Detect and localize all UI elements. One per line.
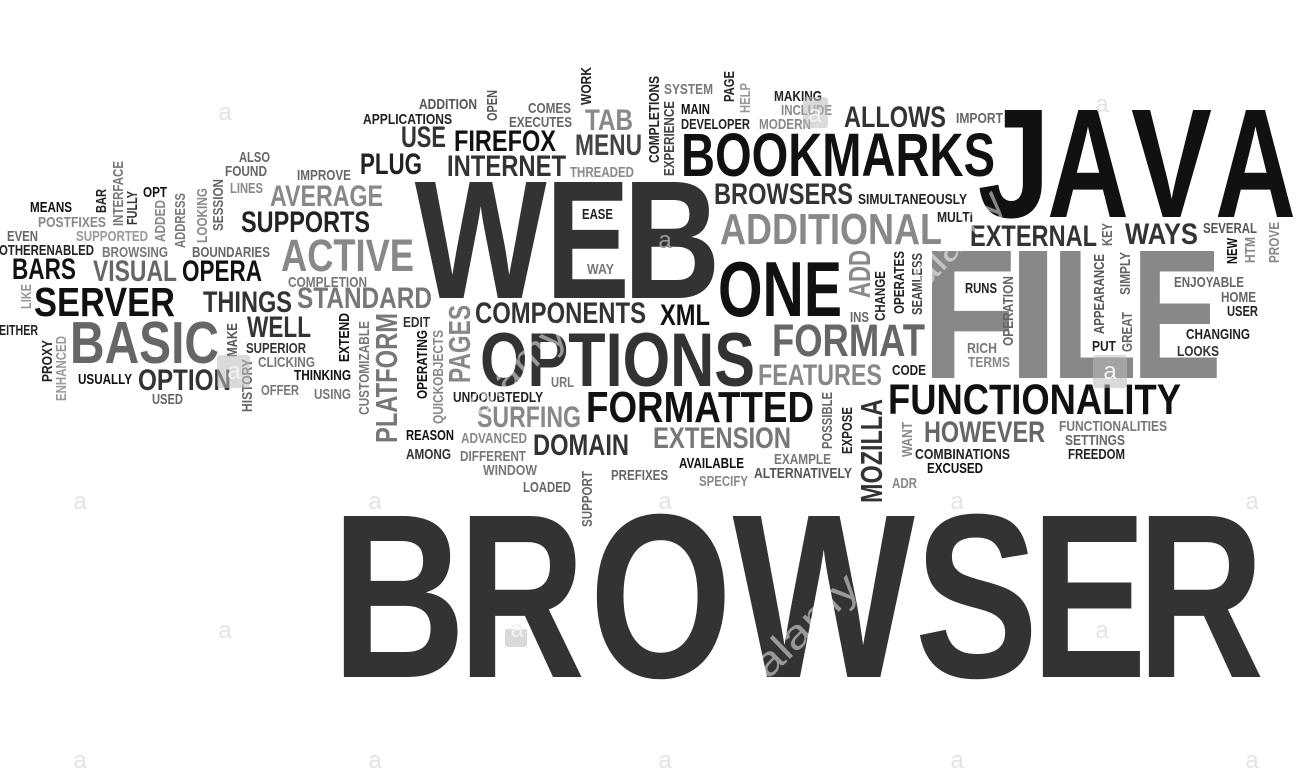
word: BROWSER: E [1031, 465, 1147, 727]
small words: left cluster: MEANS [30, 199, 72, 216]
word: BROWSER: W [732, 465, 915, 727]
small words: left cluster: EVEN [7, 228, 38, 245]
small words: top cluster: SYSTEM [664, 81, 713, 98]
small words: right cluster: CHANGING [1186, 326, 1250, 343]
medium words: EXTERNAL [970, 220, 1097, 253]
small words: centre cluster: EXTEND [336, 313, 353, 362]
small words: left cluster: USUALLY [78, 371, 132, 388]
small words: left cluster: PROXY [39, 340, 56, 382]
small words: right cluster: HOME [1221, 289, 1256, 306]
small words: centre cluster: WINDOW [483, 462, 538, 479]
small words: centre cluster: REASON [406, 427, 454, 444]
small words: right cluster: ENJOYABLE [1174, 274, 1244, 291]
watermark: diagonal alamy marks: alamy [900, 181, 1013, 296]
small words: right cluster: RICH [967, 340, 997, 357]
word: JAVA: J [978, 76, 1051, 250]
small words: centre cluster: OPERATES [891, 251, 908, 314]
small words: top cluster: SIMULTANEOUSLY [858, 191, 967, 208]
medium words: COMPONENTS [475, 297, 646, 330]
small words: right cluster: HTM [1242, 237, 1259, 263]
small words: left cluster: OTHERENABLED [0, 242, 94, 259]
small words: right cluster: APPEARANCE [1091, 254, 1108, 334]
medium words: WELL [247, 311, 311, 344]
medium words: FEATURES [758, 359, 882, 392]
word: FILE: F [922, 212, 1016, 418]
watermark: letter marks: a [1095, 617, 1109, 644]
small words: top cluster: THREADED [570, 164, 634, 181]
word: WEB: E [546, 145, 630, 334]
small words: left cluster: OFFER [261, 382, 299, 399]
small words: left cluster: USED [152, 391, 183, 408]
watermark: letter marks: a [950, 488, 964, 515]
small words: top cluster: MULTI [937, 209, 973, 226]
small words: centre cluster: CHANGE [872, 271, 889, 321]
word: FILE: I [1006, 212, 1060, 418]
small words: left cluster: OPT [143, 184, 167, 201]
word: BASIC: BASIC [70, 310, 219, 376]
medium words: STANDARD [297, 282, 432, 315]
small words: centre cluster: EXPOSE [839, 407, 856, 454]
watermark: letter marks: a [218, 617, 232, 644]
small words: right cluster: LOOKS [1177, 343, 1219, 360]
small words: centre cluster: CUSTOMIZABLE [356, 321, 373, 415]
small words: left cluster: BROWSING [102, 244, 168, 261]
medium words: OPTION [138, 364, 231, 397]
word: FORMATTED: FORMATTED [586, 383, 814, 432]
word: WEB: W [415, 145, 547, 334]
small words: top cluster: PAGE [721, 71, 738, 102]
small words: centre cluster: WANT [899, 422, 916, 457]
word: ADDITIONAL: ADDITIONAL [720, 205, 942, 254]
small words: top cluster: APPLICATIONS [363, 111, 452, 128]
small words: top cluster: MODERN [759, 116, 811, 133]
small words: left cluster: HISTORY [239, 359, 256, 412]
word: BROWSER: S [915, 465, 1038, 727]
small words: left cluster: EITHER [0, 322, 38, 339]
word: FORMAT: FORMAT [772, 315, 925, 366]
watermark: letter marks: a [658, 488, 672, 515]
medium words: TAB [585, 104, 633, 137]
small words: top cluster: EXECUTES [509, 114, 572, 131]
medium words: ALLOWS [844, 101, 946, 134]
medium words: PLUG [360, 148, 422, 181]
small words: centre cluster: EXAMPLE [774, 451, 831, 468]
watermark: diagonal alamy marks: alamy [744, 565, 868, 686]
watermark: letter marks: a [218, 99, 232, 126]
medium words: INTERNET [447, 150, 566, 183]
word: BOOKMARKS: BOOKMARKS [681, 121, 995, 189]
small words: centre cluster: QUICKOBJECTS [430, 330, 447, 424]
small words: right cluster [915, 220, 1283, 477]
small words: left cluster: SESSION [210, 179, 227, 231]
small words: right cluster: SIMPLY [1117, 252, 1134, 295]
medium words: BARS [12, 253, 76, 286]
word: ACTIVE: ACTIVE [281, 230, 414, 281]
word: SERVER: SERVER [34, 279, 175, 325]
small words: right cluster: OPERATION [1000, 276, 1017, 346]
watermark: letter marks: a [73, 488, 87, 515]
medium words: AVERAGE [270, 180, 383, 213]
small words: centre cluster: POSSIBLE [819, 392, 836, 449]
small words: centre cluster: SEAMLESS [909, 253, 926, 315]
word: ADD: ADD [842, 250, 877, 298]
small words: centre cluster: AVAILABLE [679, 455, 744, 472]
watermark: diagonal alamy marks: alamy [457, 312, 575, 425]
medium words: XML [660, 299, 710, 332]
medium words [12, 101, 1198, 462]
small words: centre cluster: OPERATING [414, 330, 431, 399]
small words: left cluster: SUPPORTED [76, 228, 148, 245]
medium words: SURFING [477, 401, 581, 434]
small words: right cluster: FUNCTIONALITIES [1059, 418, 1167, 435]
watermark: letter marks: a [808, 101, 822, 128]
small words: top cluster [297, 67, 1003, 278]
watermark: letter marks: a [227, 358, 241, 385]
small words: centre cluster: ADVANCED [461, 430, 527, 447]
small words: right cluster: FREEDOM [1068, 446, 1125, 463]
word: BROWSER: R [458, 465, 585, 727]
small words: centre cluster: EDIT [403, 314, 430, 331]
small words: left cluster: ADDED [152, 200, 169, 242]
small words: left cluster: FOUND [225, 163, 267, 180]
word: PLATFORM: PLATFORM [369, 313, 404, 443]
small words: right cluster: SETTINGS [1065, 432, 1125, 449]
word: MOZILLA: MOZILLA [854, 399, 889, 503]
small words: top cluster: OPEN [484, 90, 501, 121]
small words: top cluster: COMPLETIONS [646, 76, 663, 163]
small words: right cluster: NEW [1224, 237, 1241, 264]
small words: top cluster: EXPERIENCE [661, 101, 678, 176]
small words: right cluster: USER [1227, 303, 1258, 320]
small words: left cluster: FULLY [124, 191, 141, 225]
word: OPTIONS: OPTIONS [480, 318, 755, 403]
small words: left cluster: LIKE [18, 284, 35, 309]
small words: centre cluster: THINKING [294, 367, 351, 384]
medium words: USE [401, 121, 446, 154]
small words: centre cluster: URL [551, 374, 574, 391]
small words: right cluster: TERMS [968, 354, 1010, 371]
medium words: BROWSERS [714, 178, 853, 211]
small words: left cluster [0, 149, 315, 412]
word: JAVA: A [1047, 76, 1129, 250]
word: FILE: L [1051, 212, 1137, 418]
small words: right cluster: GREAT [1119, 312, 1136, 352]
small words: left cluster: LINES [230, 180, 263, 197]
small words: centre cluster: AMONG [406, 446, 451, 463]
small words: left cluster: ADDRESS [172, 193, 189, 248]
word: JAVA: V [1131, 76, 1212, 250]
small words: centre cluster: ADR [892, 475, 917, 492]
small words: left cluster: INTERFACE [110, 161, 127, 226]
small words: top cluster: MAKING [774, 88, 822, 105]
word: WEB: B [623, 145, 720, 334]
small words: centre cluster: INS [850, 309, 869, 326]
small words: left cluster: BAR [93, 189, 110, 213]
small words: top cluster: COMES [528, 100, 571, 117]
small words: centre cluster: DIFFERENT [460, 448, 526, 465]
small words: right cluster: PUT [1092, 338, 1116, 355]
small words: centre cluster: CODE [892, 362, 926, 379]
small words: top cluster: MAIN [681, 101, 710, 118]
medium words: EXTENSION [653, 422, 791, 455]
word: BROWSER: B [331, 465, 466, 727]
word: PAGES: PAGES [442, 305, 477, 383]
medium words: DOMAIN [533, 429, 629, 462]
small words: top cluster: IMPORT [956, 110, 1003, 127]
small words: left cluster: SUPERIOR [246, 340, 306, 357]
small words: centre cluster: USING [314, 386, 351, 403]
small words: top cluster: WAY [587, 261, 614, 278]
small words: centre cluster: SUPPORT [579, 471, 596, 527]
word: BROWSER: O [589, 465, 732, 727]
small words: top cluster: INCLUDE [781, 102, 832, 119]
word: ONE: ONE [718, 245, 842, 333]
small words: top cluster: HELP [737, 83, 754, 113]
small words: right cluster: RUNS [965, 280, 997, 297]
small words: left cluster: ALSO [239, 149, 270, 166]
small words: centre cluster: LOADED [523, 479, 571, 496]
small words: centre cluster [288, 251, 926, 527]
small words: top cluster: ADDITION [419, 96, 477, 113]
medium words: VISUAL [93, 255, 177, 288]
small words: centre cluster: UNDOUBTEDLY [453, 389, 543, 406]
small words: left cluster: MAKE [224, 323, 241, 357]
watermark: diagonal alamy marks [457, 181, 1013, 686]
small words: right cluster: KEY [1099, 223, 1116, 246]
small words: left cluster: LOOKING [194, 188, 211, 243]
medium words: OPERA [182, 255, 262, 288]
small words: right cluster: SEVERAL [1203, 220, 1257, 237]
word: FILE: E [1131, 212, 1222, 418]
small words: top cluster: WORK [578, 67, 595, 105]
small words: centre cluster: ALTERNATIVELY [754, 465, 852, 482]
watermark: letter marks: a [658, 227, 672, 254]
medium words: SUPPORTS [241, 206, 370, 239]
medium words: WAYS [1125, 218, 1198, 251]
word: FUNCTIONALITY: FUNCTIONALITY [888, 376, 1181, 424]
medium words: FIREFOX [454, 125, 556, 158]
small words: right cluster: COMBINATIONS [915, 446, 1010, 463]
medium words: MENU [575, 129, 642, 162]
small words: centre cluster: SPECIFY [699, 473, 748, 490]
medium words: THINGS [203, 286, 292, 319]
watermark: letter marks: a [1095, 91, 1109, 118]
small words: right cluster: PROVE [1266, 222, 1283, 263]
watermark: grey boxes [217, 97, 1127, 647]
watermark: letter marks: a [368, 488, 382, 515]
small words: right cluster: EXCUSED [927, 460, 983, 477]
small words: top cluster: DEVELOPER [681, 116, 750, 133]
watermark: letter marks: a [510, 616, 524, 643]
medium words: HOWEVER [924, 416, 1045, 449]
small words: centre cluster: PREFIXES [611, 467, 668, 484]
watermark: letter marks: a [1245, 488, 1259, 515]
small words: centre cluster: COMPLETION [288, 274, 367, 291]
small words: top cluster: IMPROVE [297, 167, 351, 184]
small words: top cluster: EASE [582, 206, 613, 223]
watermark: letter marks: a [1103, 358, 1117, 385]
small words: left cluster: CLICKING [258, 354, 315, 371]
small words: left cluster: POSTFIXES [38, 214, 106, 231]
small words: left cluster: ENHANCED [53, 336, 70, 401]
small words: left cluster: BOUNDARIES [192, 244, 270, 261]
